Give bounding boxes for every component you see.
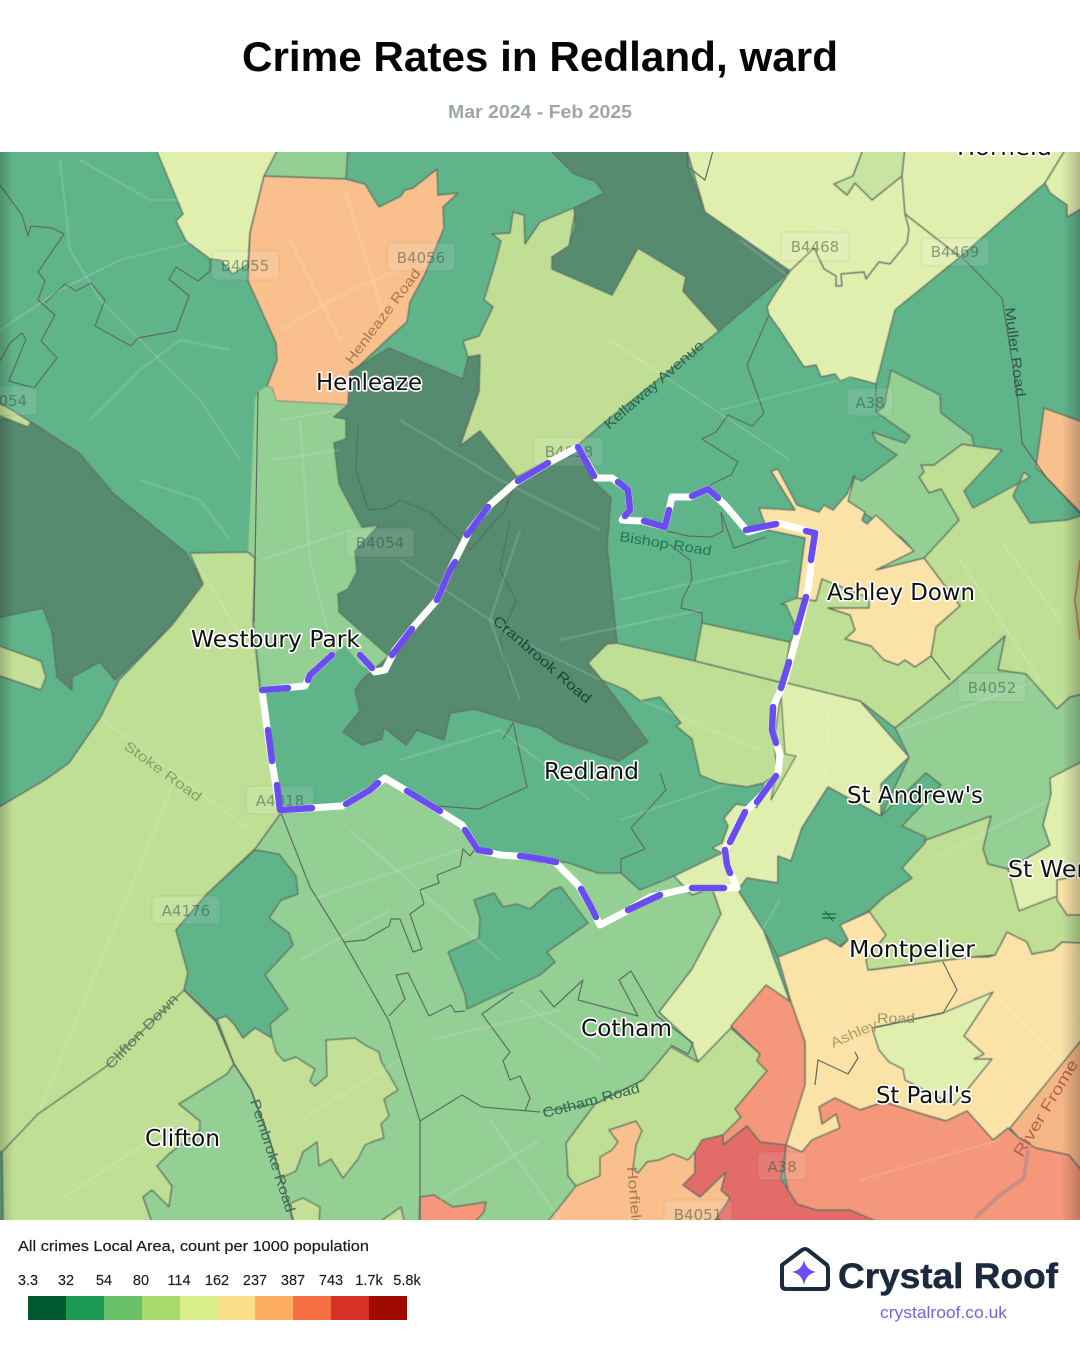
road name labels (102, 265, 1080, 1229)
place name labels: St Andrew's (847, 783, 983, 809)
place name labels: St Paul's (876, 1083, 972, 1109)
subtitle: date range: Mar 2024 - Feb 2025 (448, 102, 632, 122)
map edge vignette (0, 152, 1080, 1220)
legend: value labels and colour scale: 743 (319, 1273, 343, 1289)
place name labels: Montpelier (849, 937, 976, 963)
road shield labels: A4018 (256, 792, 304, 810)
district boundary lines (0, 147, 1080, 1225)
road shield labels: B4051 (674, 1206, 722, 1224)
icon: Crystal Roof house logo (782, 1249, 828, 1289)
river Frome stream (975, 1150, 1028, 1218)
icon: railway station (822, 911, 836, 921)
legend: value labels and colour scale: 80 (133, 1273, 149, 1289)
legend: value labels and colour scale: 32 (58, 1273, 74, 1289)
legend: value labels and colour scale: 54 (96, 1273, 112, 1289)
road name labels: Pembroke Road (247, 1097, 299, 1214)
road shield labels (0, 232, 1026, 1230)
road name labels: Kellaway Avenue (600, 337, 707, 432)
place name labels: Horfield (957, 135, 1052, 161)
road shield labels: B4055 (221, 257, 269, 275)
legend: value labels and colour scale: 237 (243, 1273, 267, 1289)
road name labels: Bishop Road (619, 528, 713, 559)
legend: value labels and colour scale: 114 (167, 1273, 191, 1289)
place name labels (145, 135, 1080, 1152)
road name labels: Cotham Road (541, 1080, 641, 1121)
legend: value labels and colour scale: 3.3 (18, 1273, 38, 1289)
place name labels: Ashley Down (827, 580, 975, 606)
road name labels: Clifton Down (102, 990, 181, 1072)
place name labels: Redland (544, 759, 639, 785)
Redland ward boundary: white line with purple dashes (262, 447, 815, 925)
legend: value labels and colour scale: 5.8k (393, 1273, 421, 1289)
logo wordmark: Crystal Roof (838, 1257, 1058, 1296)
legend: value labels and colour scale: 162 (205, 1273, 229, 1289)
map regions (0, 147, 1080, 1225)
road shield labels: B4058 (545, 443, 593, 461)
road name labels: Road (877, 1010, 915, 1026)
road shield labels: B4468 (791, 238, 839, 256)
road shield labels: B4054 (356, 534, 404, 552)
title: Crime Rates in Redland, ward (242, 33, 838, 80)
road shield labels: B4056 (397, 249, 445, 267)
road shield labels: A4176 (162, 902, 210, 920)
website url: crystalroof.co.uk (880, 1304, 1008, 1322)
road name labels: Muller Road (1002, 306, 1029, 398)
place name labels: Cotham (581, 1016, 672, 1042)
road shield labels: B4052 (968, 679, 1016, 697)
place name labels: Clifton (145, 1126, 220, 1152)
river Frome edge (1075, 560, 1080, 640)
road shield labels: A38 (767, 1158, 797, 1176)
place name labels: Henleaze (316, 370, 422, 396)
faint lines inside dark districts (356, 425, 516, 680)
road shield labels: A38 (855, 394, 885, 412)
road name labels: Cranbrook Road (490, 612, 595, 706)
road name labels: River Frome (1011, 1057, 1080, 1160)
legend: value labels and colour scale: 387 (281, 1273, 305, 1289)
road name labels: Ashley (828, 1016, 880, 1051)
legend: value labels and colour scale (18, 1273, 421, 1320)
road shield labels: B4469 (931, 243, 979, 261)
legend: value labels and colour scale: 1.7k (355, 1273, 383, 1289)
road name labels: Horfield (624, 1166, 645, 1229)
legend title: All crimes Local Area, count per 1000 population (18, 1239, 369, 1255)
street network (0, 160, 1060, 1220)
road name labels: Henleaze Road (342, 265, 424, 367)
place name labels: Westbury Park (191, 627, 361, 653)
road name labels: Stoke Road (121, 737, 205, 805)
